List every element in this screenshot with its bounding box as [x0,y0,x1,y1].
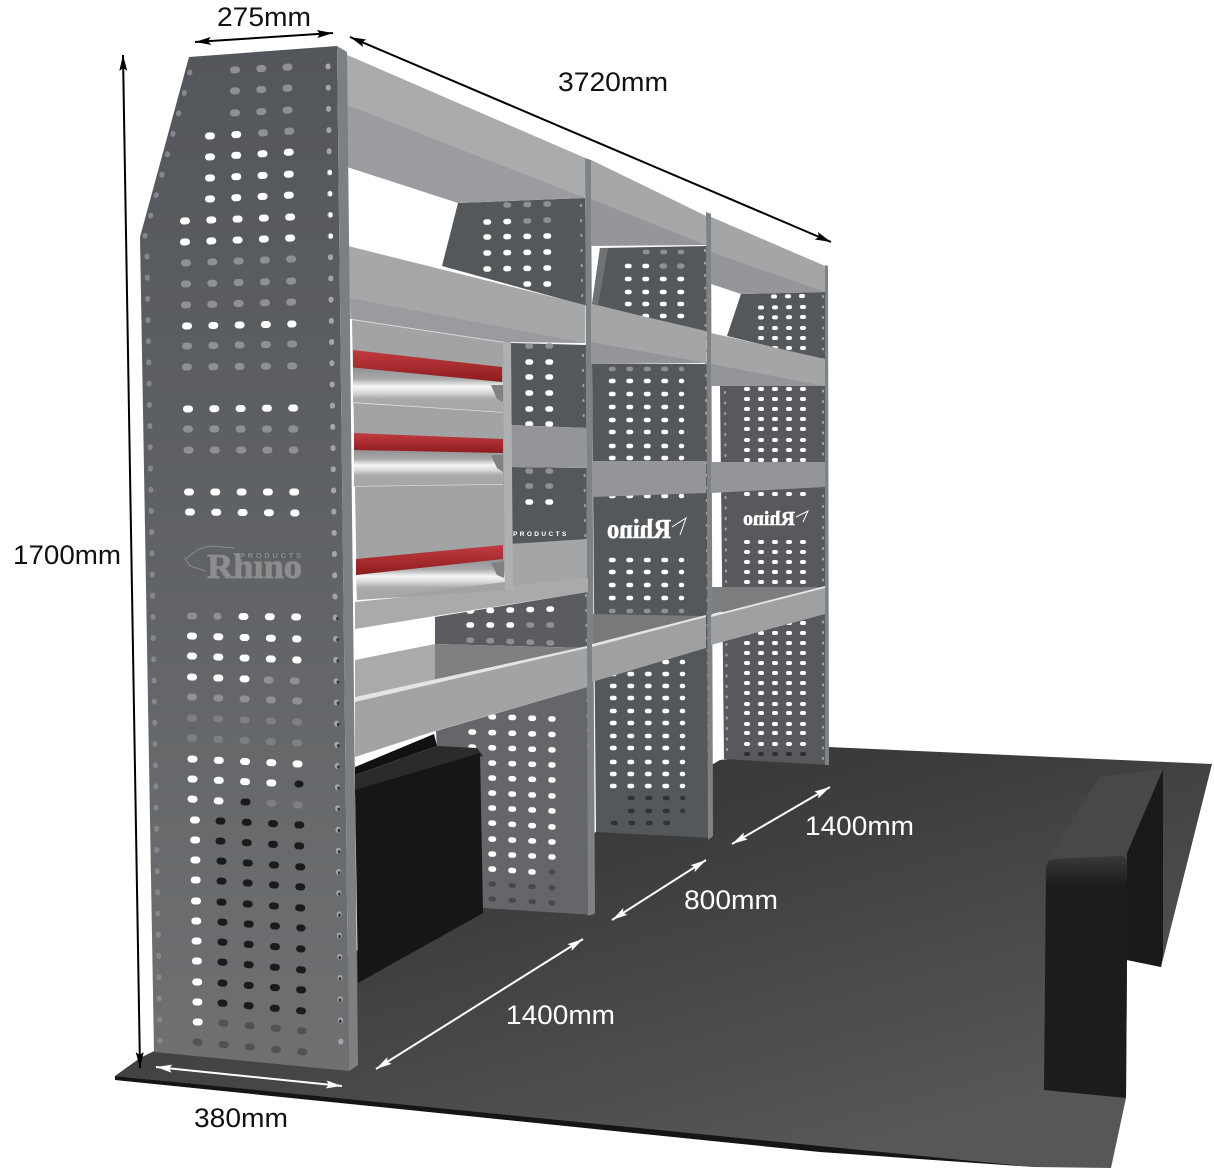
front panel white first-column holes [193,820,199,1022]
bay 2 dark bottom holes [613,798,683,823]
dimension: bay 1400mm rear: 1400mm [805,811,914,841]
bay 1 small logo text: PRODUCTS [513,531,569,538]
dimension: bay 1400mm rear [732,787,914,844]
bay 2 side strip holes [705,250,709,830]
bay 1 side strip holes [581,205,590,905]
drawer 3 [353,484,505,600]
front panel logo: Rhino [207,547,302,586]
front panel dark edge hole centres [337,618,340,1040]
dimension: length 3720mm: 3720mm [558,67,668,97]
dimension: bay 800mm: 800mm [684,885,778,915]
second shelf beams [348,246,825,386]
dimension: depth top 275mm: 275mm [217,2,311,32]
drawer 2 [354,433,503,486]
front panel bottom holes [196,1023,304,1052]
dimension: base depth 380mm: 380mm [194,1103,288,1133]
drawer latch recesses [491,385,504,578]
rack bay 2 back panel [592,246,712,838]
dimension: length 3720mm [350,37,831,242]
front panel right edge holes [328,66,341,1056]
rack bay 3 back panel [720,292,828,765]
front panel mid-grey holes [190,718,300,805]
middle shelf bands [510,425,825,497]
front panel logo: PRODUCTS [240,551,304,560]
front panel grey holes [184,67,299,701]
front panel dark holes seen through [219,784,303,1011]
right wheel arch [1044,769,1163,1098]
front panel white holes [184,134,299,801]
dimension: base depth 380mm [156,1067,342,1133]
dimension: height 1700mm [13,55,140,1068]
drawer 1 [352,319,503,413]
rack bay 1 back panels [435,198,594,915]
front end panel [140,46,358,1071]
dimension: bay 1400mm front [376,939,615,1069]
bay 3 logo: Rhino [743,508,795,530]
bay 2 perforations [611,266,683,786]
bay 3 perforations [746,296,805,744]
dimension: bay 800mm [612,860,778,920]
uprights [585,158,829,916]
front panel bright edge holes [330,172,331,240]
bay 1 grey holes [469,204,553,643]
left wheel arch [355,734,483,983]
bay 1 dark holes [491,872,553,903]
front panel left edge holes [145,72,190,1042]
bay 2 grey holes [611,252,682,611]
bay 2 logo: Rhino [607,514,671,544]
dimension: bay 1400mm front: 1400mm [506,1000,615,1030]
van floor [115,747,1212,1168]
dimension: height 1700mm: 1700mm [13,540,121,570]
bay 3 side strip holes [725,296,823,764]
lower shelf fronts [355,539,825,757]
bay 1 white holes [469,222,553,872]
top shelf beams [347,55,825,294]
dimension: depth top 275mm [195,2,333,42]
drawer unit [352,319,513,600]
